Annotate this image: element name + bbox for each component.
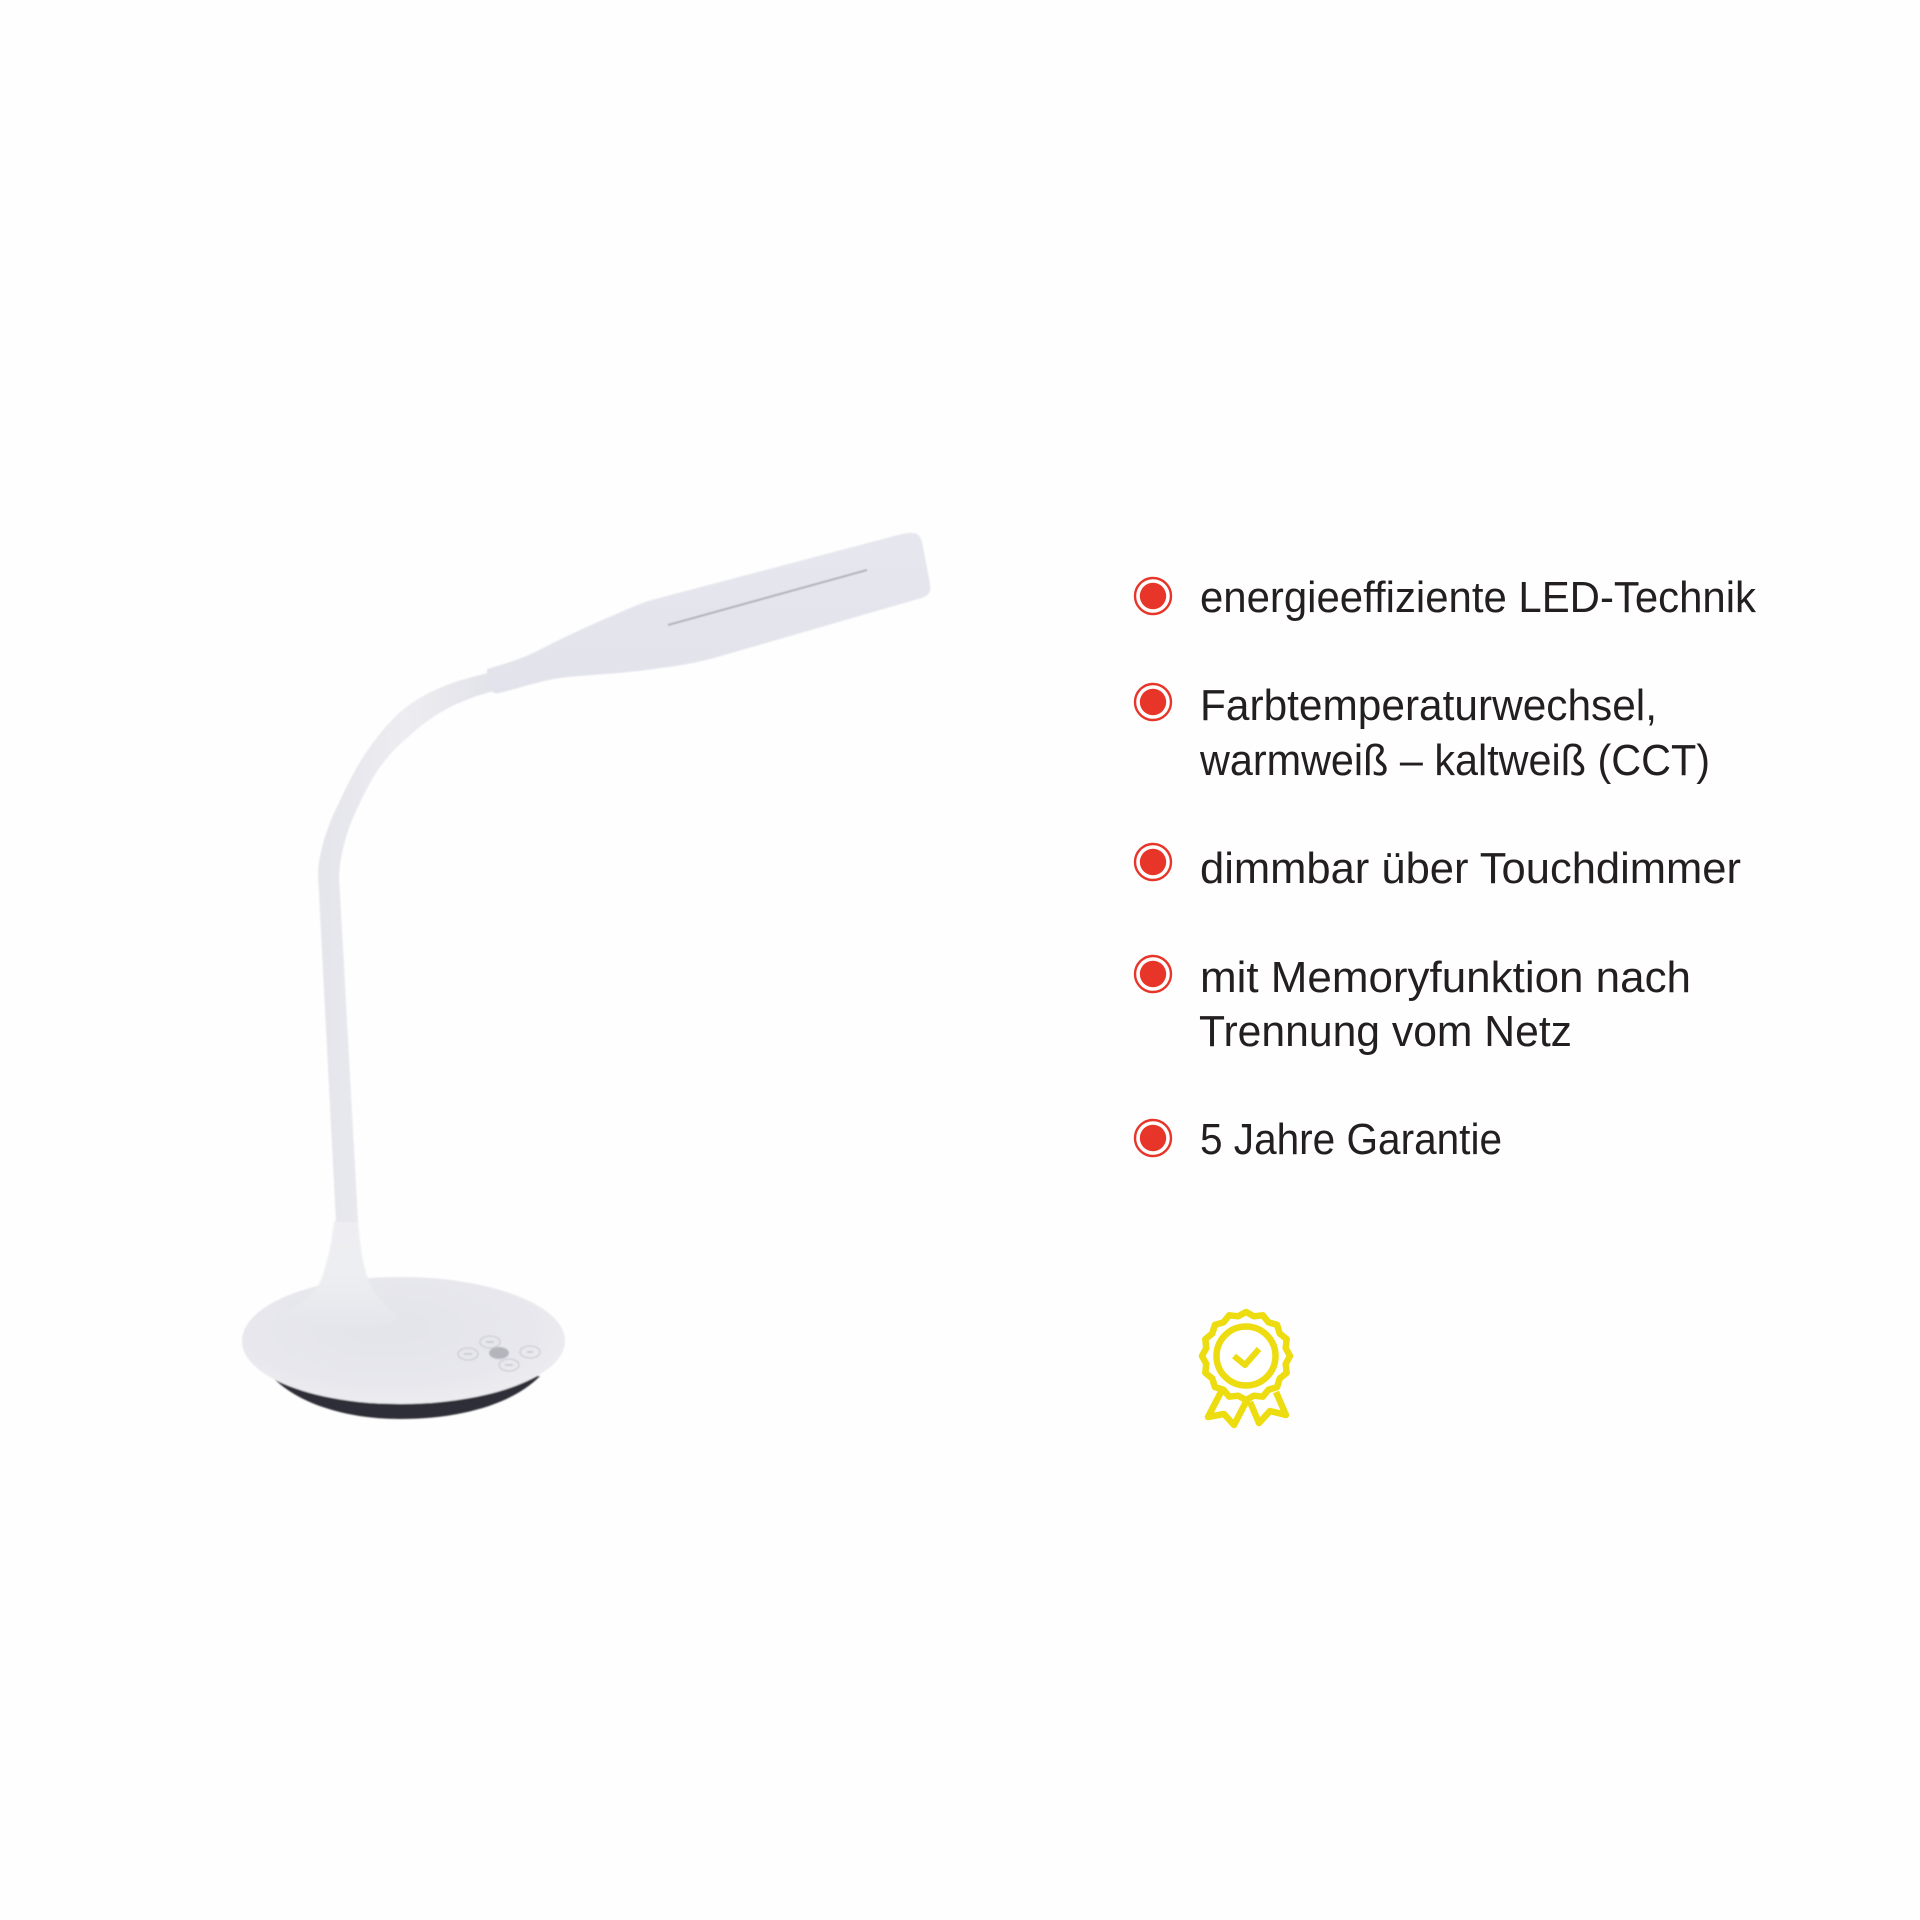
feature: colour temperature bbox=[1135, 681, 1710, 785]
check mark bbox=[1234, 1349, 1259, 1365]
ribbon tails bbox=[1208, 1392, 1286, 1425]
bullet icon bbox=[1135, 844, 1171, 880]
feature text: Trennung vom Netz bbox=[1199, 1007, 1572, 1056]
feature: dimming bbox=[1135, 844, 1741, 893]
touch buttons bbox=[458, 1336, 540, 1371]
right button bbox=[520, 1346, 540, 1358]
feature list bbox=[1135, 573, 1757, 1164]
feature text: dimmbar über Touchdimmer bbox=[1200, 844, 1741, 893]
flared stem bbox=[280, 1221, 400, 1331]
inner ring bbox=[1216, 1326, 1276, 1386]
feature: memory function bbox=[1135, 953, 1691, 1056]
LED strip bbox=[668, 570, 867, 625]
bottom button bbox=[499, 1359, 519, 1371]
desk lamp illustration bbox=[242, 533, 930, 1419]
left button bbox=[458, 1348, 478, 1360]
feature text: energieeffiziente LED-Technik bbox=[1200, 573, 1757, 622]
bullet icon bbox=[1135, 578, 1171, 614]
top button bbox=[480, 1336, 500, 1348]
lamp base underside bbox=[268, 1372, 540, 1419]
lamp base disc bbox=[242, 1277, 565, 1404]
feature text bbox=[1199, 681, 1710, 785]
feature: warranty bbox=[1135, 1115, 1502, 1164]
feature: LED technology bbox=[1135, 573, 1757, 622]
centre button bbox=[489, 1347, 509, 1359]
feature text: mit Memoryfunktion nach bbox=[1200, 953, 1691, 1002]
feature text: warmweiß – kaltweiß (CCT) bbox=[1199, 736, 1710, 785]
feature text: 5 Jahre Garantie bbox=[1200, 1115, 1502, 1164]
icon: warranty rosette bbox=[1202, 1312, 1290, 1425]
feature text bbox=[1199, 953, 1691, 1056]
bullet icon bbox=[1135, 956, 1171, 992]
flexible neck bbox=[318, 673, 494, 1222]
feature text: Farbtemperaturwechsel, bbox=[1200, 681, 1657, 730]
scalloped seal bbox=[1202, 1312, 1290, 1400]
bullet icon bbox=[1135, 684, 1171, 720]
lamp head bbox=[487, 533, 930, 693]
bullet icon bbox=[1135, 1120, 1171, 1156]
